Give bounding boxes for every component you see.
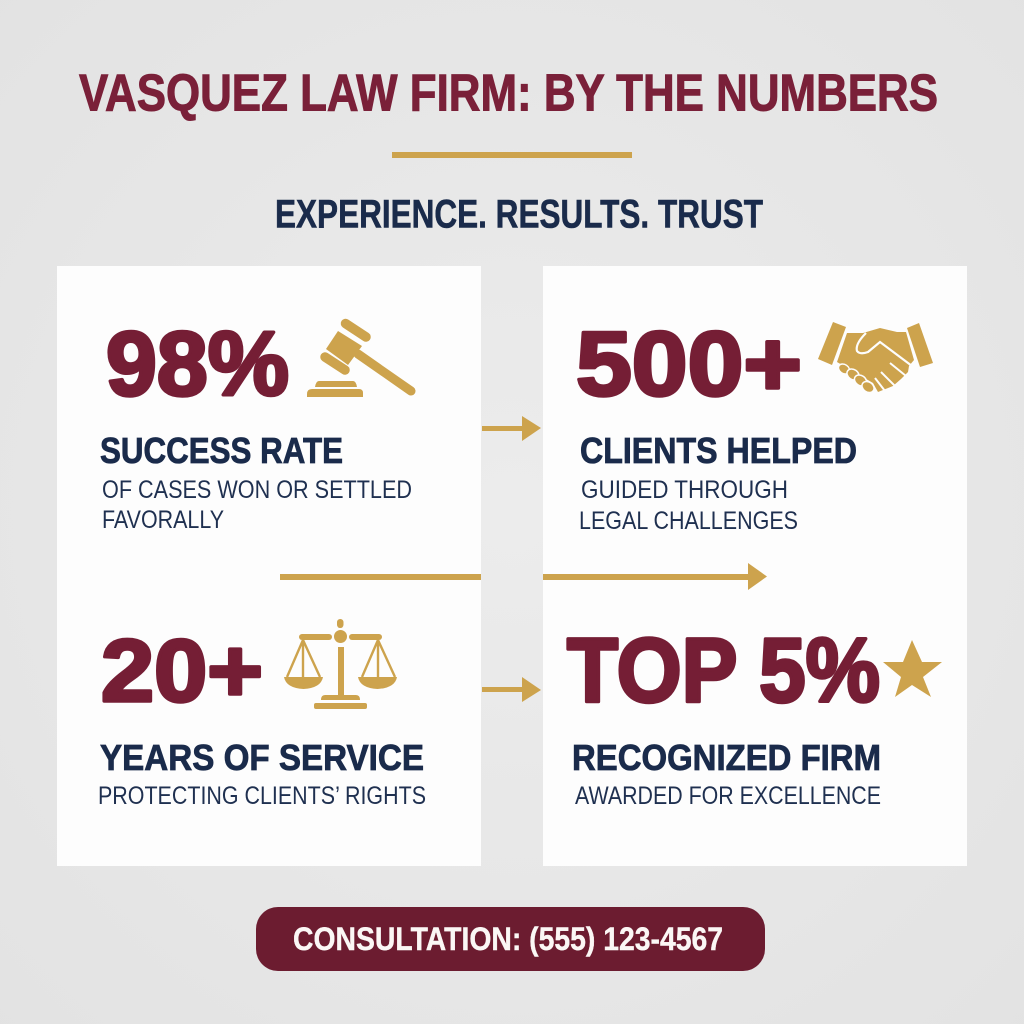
call to action bbox=[256, 907, 765, 971]
stat: 98%: 98% bbox=[106, 314, 289, 415]
description: clients helped: GUIDED THROUGH bbox=[581, 476, 788, 504]
icon: gavel bbox=[307, 324, 411, 397]
arrow: bottom connector bbox=[482, 677, 541, 702]
panel: left stats bbox=[57, 266, 481, 866]
stat: 20+: 20+ bbox=[101, 621, 263, 720]
arrow: top connector bbox=[482, 416, 541, 441]
label: recognized firm: RECOGNIZED FIRM bbox=[572, 737, 881, 778]
icon: scales bbox=[284, 619, 397, 709]
call to action: CONSULTATION: (555) 123-4567 bbox=[293, 921, 723, 957]
icon: star bbox=[883, 640, 942, 697]
label: years of service: YEARS OF SERVICE bbox=[100, 737, 424, 778]
title divider bbox=[392, 152, 632, 158]
label: clients helped: CLIENTS HELPED bbox=[580, 430, 857, 471]
description: success rate: OF CASES WON OR SETTLED bbox=[102, 476, 412, 504]
panel: right stats bbox=[543, 266, 967, 866]
description: clients helped: LEGAL CHALLENGES bbox=[579, 507, 798, 535]
description: success rate: FAVORALLY bbox=[102, 506, 224, 534]
stat: top 5%: TOP 5% bbox=[567, 620, 880, 722]
stat: 500+: 500+ bbox=[576, 314, 802, 415]
arrow: middle connector right bbox=[543, 563, 767, 590]
description: recognized firm: AWARDED FOR EXCELLENCE bbox=[575, 782, 881, 810]
description: success rate bbox=[102, 476, 412, 534]
label: success rate: SUCCESS RATE bbox=[100, 430, 343, 471]
icon: handshake bbox=[818, 322, 933, 395]
subtitle: EXPERIENCE. RESULTS. TRUST bbox=[275, 192, 763, 236]
description: years of service: PROTECTING CLIENTS’ RIGHTS bbox=[98, 782, 426, 810]
description: clients helped bbox=[579, 476, 798, 535]
arrow: middle connector left bbox=[280, 574, 481, 580]
